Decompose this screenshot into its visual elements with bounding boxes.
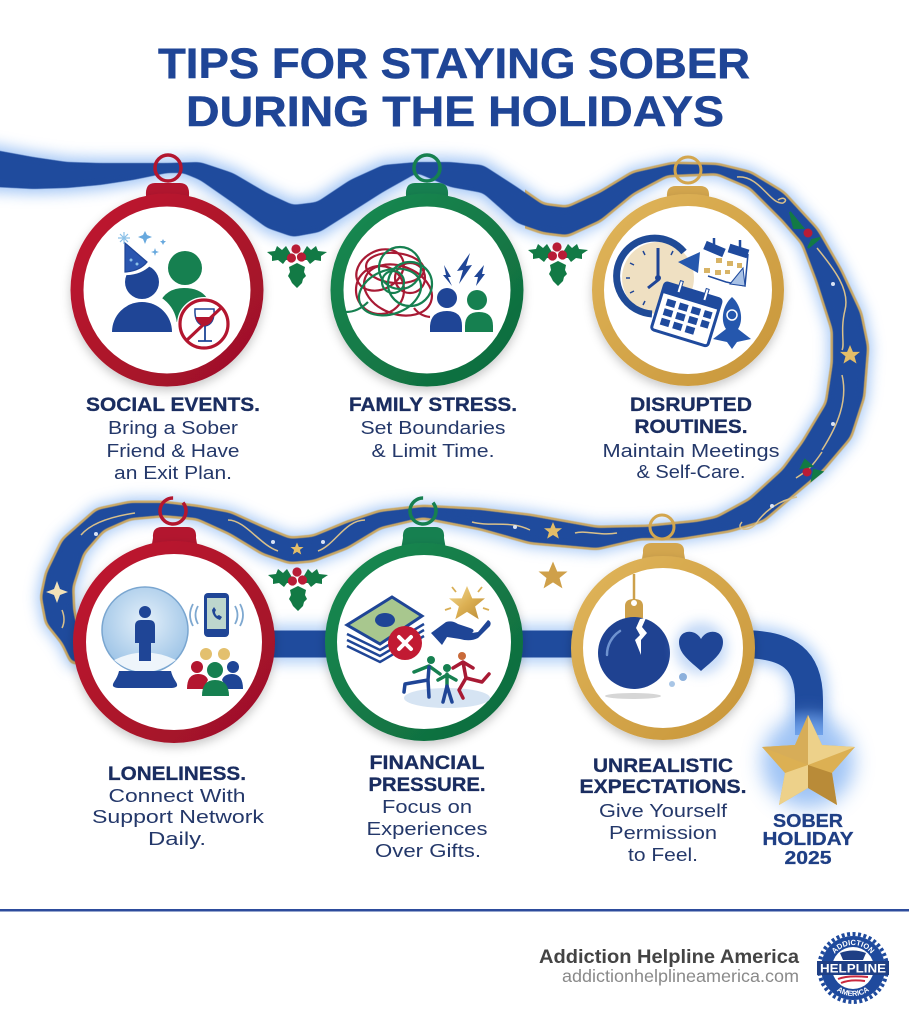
caption: financial pressure: FINANCIAL bbox=[370, 752, 485, 774]
caption: financial pressure bbox=[366, 752, 488, 861]
caption: social events bbox=[86, 394, 260, 483]
caption: financial pressure: PRESSURE. bbox=[368, 774, 486, 796]
footer: organisation name: addictionhelplineamerica.com bbox=[562, 966, 799, 986]
title bbox=[158, 40, 750, 136]
caption: disrupted routines: Maintain Meetings bbox=[602, 440, 780, 461]
ornament: financial pressure bbox=[331, 493, 517, 735]
icon: clock, calendars and meditation bbox=[617, 238, 751, 349]
caption: sober holiday 2025: SOBER bbox=[773, 811, 843, 831]
ribbon holly sprigs bbox=[790, 212, 822, 480]
caption: sober holiday 2025 bbox=[762, 811, 854, 868]
caption: social events: Bring a Sober bbox=[108, 417, 238, 438]
caption: social events: an Exit Plan. bbox=[114, 462, 232, 483]
caption: family stress bbox=[349, 394, 517, 461]
holly top right bbox=[528, 242, 588, 286]
title: TIPS FOR STAYING SOBER bbox=[158, 40, 750, 88]
caption: family stress: Set Boundaries bbox=[360, 417, 506, 438]
caption: loneliness: Daily. bbox=[148, 828, 206, 849]
caption: disrupted routines: DISRUPTED bbox=[630, 394, 752, 416]
caption: family stress: FAMILY STRESS. bbox=[349, 394, 517, 416]
icon: cracked ornament and heart bbox=[598, 574, 727, 699]
caption: disrupted routines: ROUTINES. bbox=[634, 416, 748, 438]
caption: unrealistic expectations bbox=[580, 755, 746, 865]
caption: financial pressure: Focus on bbox=[382, 796, 472, 817]
ornament: unrealistic expectations bbox=[577, 515, 749, 734]
ornament: loneliness bbox=[80, 493, 268, 736]
caption: sober holiday 2025: HOLIDAY bbox=[762, 829, 854, 849]
footer: logo badge: HELPLINE bbox=[820, 962, 886, 976]
icon: goal star bbox=[762, 715, 855, 808]
ribbon: garland path bbox=[0, 146, 867, 735]
icon: decorative gold star bbox=[538, 562, 568, 588]
icon: tangled threads and two stressed people bbox=[346, 241, 493, 332]
icon: snow globe, phone and support group bbox=[102, 587, 243, 696]
ornament: social events bbox=[77, 155, 257, 380]
caption: unrealistic expectations: EXPECTATIONS. bbox=[580, 776, 746, 798]
holly bottom bbox=[268, 567, 328, 611]
ribbon decorations bbox=[62, 177, 846, 628]
ornament: disrupted routines bbox=[598, 157, 778, 380]
footer: logo badge: ADDICTION bbox=[832, 940, 875, 954]
caption: loneliness: Connect With bbox=[108, 785, 246, 806]
caption: sober holiday 2025: 2025 bbox=[784, 848, 832, 868]
caption: unrealistic expectations: Permission bbox=[609, 822, 717, 843]
footer: logo badge: AMERICA bbox=[836, 987, 870, 996]
caption: loneliness: LONELINESS. bbox=[108, 763, 246, 785]
caption: unrealistic expectations: UNREALISTIC bbox=[593, 755, 733, 777]
caption: financial pressure: Over Gifts. bbox=[375, 840, 481, 861]
caption: social events: Friend & Have bbox=[106, 440, 240, 461]
title: DURING THE HOLIDAYS bbox=[186, 88, 724, 136]
caption: disrupted routines bbox=[602, 394, 780, 482]
ornament: family stress bbox=[337, 155, 517, 380]
icon: money, gift hand and skaters bbox=[347, 586, 491, 708]
holly top left bbox=[267, 244, 327, 288]
ribbon stars bbox=[46, 282, 860, 603]
icon: party guests with no alcohol bbox=[107, 231, 231, 351]
caption: loneliness: Support Network bbox=[92, 806, 265, 827]
caption: loneliness bbox=[92, 763, 265, 849]
caption: family stress: & Limit Time. bbox=[372, 440, 494, 461]
caption: unrealistic expectations: to Feel. bbox=[628, 844, 698, 865]
caption: financial pressure: Experiences bbox=[366, 818, 488, 839]
footer: logo badge bbox=[817, 932, 889, 1004]
footer: organisation name bbox=[539, 946, 799, 986]
caption: social events: SOCIAL EVENTS. bbox=[86, 394, 260, 416]
caption: disrupted routines: & Self-Care. bbox=[636, 461, 746, 482]
caption: unrealistic expectations: Give Yourself bbox=[599, 800, 728, 821]
footer: organisation name: Addiction Helpline America bbox=[539, 946, 799, 968]
